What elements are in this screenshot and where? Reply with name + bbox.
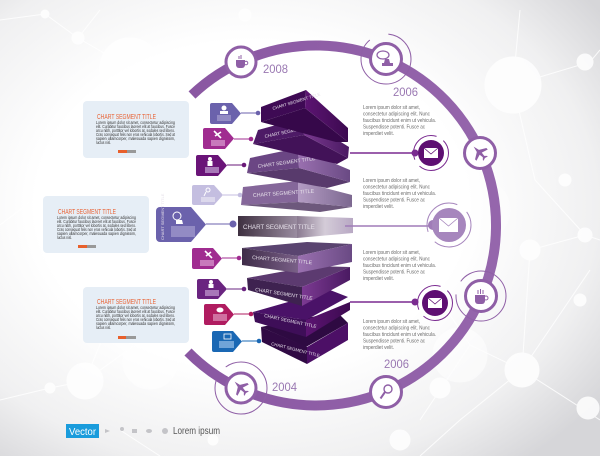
right description 1: faucibus tincidunt enim ut vehicula. <box>363 118 436 124</box>
right description 4: Lorem ipsum dolor sit amet, <box>363 319 420 325</box>
card: bottom chart segment: elit. Curabitur faucibus laoreet elit at faucibus. Fusce <box>96 309 176 314</box>
tag 6 <box>192 248 222 269</box>
tag 7 <box>197 279 227 299</box>
layer 1: CHART SEGMENT TITLE <box>272 92 321 111</box>
year 2006 top: 2006 <box>393 85 418 99</box>
card: middle chart segment: elit. Curabitur faucibus laoreet elit at faucibus. Fusce <box>57 219 137 224</box>
right description 3 <box>363 250 436 282</box>
callout: upper envelope <box>350 136 448 170</box>
right description 3: consectetur adipiscing elit. Nunc <box>363 256 430 262</box>
card: middle chart segment: CHART SEGMENT TITLE <box>58 207 116 216</box>
right description 2: faucibus tincidunt enim ut vehicula. <box>363 191 436 197</box>
card: top chart segment: luctus nisl. <box>96 140 111 145</box>
right description 4: Suspendisse potenti. Fusce ac <box>363 338 425 344</box>
layer 5: CHART SEGMENT TITLE <box>243 224 315 231</box>
card: bottom chart segment: luctus nisl. <box>96 325 111 330</box>
card: middle chart segment: luctus nisl. <box>57 235 72 240</box>
card: middle chart segment: sapien ullamcorper, malesuada sapien dignissim, <box>57 231 136 236</box>
card: middle chart segment <box>43 196 149 253</box>
layer 6 <box>242 242 352 273</box>
right description 1: imperdiet velit. <box>363 131 394 137</box>
badge: Vector: Vector <box>69 427 97 438</box>
footer label: Lorem ipsum <box>173 426 220 437</box>
card: top chart segment: sapien ullamcorper, malesuada sapien dignissim, <box>96 136 175 141</box>
card: top chart segment: CHART SEGMENT TITLE <box>97 112 156 121</box>
tag 8 <box>204 304 234 325</box>
icon: cup right <box>456 271 506 321</box>
tag 2 <box>203 128 234 149</box>
icon: plane bottom <box>215 362 267 414</box>
layer 2: CHART SEGMENT TITLE <box>264 123 317 139</box>
footer icons <box>105 427 168 434</box>
card: bottom chart segment: arcu nibh, porttitor vel lobortis at, sodales sed libero. <box>96 313 175 318</box>
right description 2 <box>363 178 436 210</box>
layer 4: CHART SEGMENT TITLE <box>253 189 315 199</box>
card: top chart segment: Lorem ipsum dolor sit amet, consectetur adipiscing <box>96 120 176 125</box>
right description 4 <box>363 319 436 351</box>
tag 4 <box>192 185 223 205</box>
icon: cup top <box>226 47 256 77</box>
right description 4: faucibus tincidunt enim ut vehicula. <box>363 332 436 338</box>
right description 3: faucibus tincidunt enim ut vehicula. <box>363 263 436 269</box>
tag 5: CHART SEGMENT TITLE <box>160 193 165 240</box>
right description 3: Suspendisse potenti. Fusce ac <box>363 270 425 276</box>
tag 5 <box>156 193 206 242</box>
card: bottom chart segment: CHART SEGMENT TITLE <box>97 297 156 306</box>
card: bottom chart segment: Lorem ipsum dolor sit amet, consectetur adipiscing <box>96 305 176 310</box>
tag 1 <box>210 103 241 124</box>
right description 1: Lorem ipsum dolor sit amet, <box>363 105 420 111</box>
right description 2: imperdiet velit. <box>363 204 394 210</box>
timeline ring <box>188 45 496 405</box>
card: top chart segment: arcu nibh, porttitor vel lobortis at, sodales sed libero. <box>96 128 175 133</box>
icon: plane right <box>464 138 496 168</box>
icon: magnifier <box>370 376 402 408</box>
layer 8 <box>253 290 350 337</box>
tag 9 <box>212 331 242 352</box>
tag connectors <box>206 111 261 343</box>
layer 3: CHART SEGMENT TITLE <box>257 156 316 170</box>
layer 9: CHART SEGMENT TITLE <box>271 341 320 358</box>
year 2006 bottom: 2006 <box>384 357 409 371</box>
layer 8: CHART SEGMENT TITLE <box>264 313 317 329</box>
card: top chart segment: Cras consequat felis non eros vehicula lobortis. Sed at <box>96 132 176 137</box>
layer 2 <box>253 118 349 164</box>
layer 1 <box>261 90 348 142</box>
card: top chart segment: elit. Curabitur faucibus laoreet elit at faucibus. Fusce <box>96 124 176 129</box>
right description 3: imperdiet velit. <box>363 276 394 282</box>
callout: lower envelope <box>350 286 452 320</box>
year 2008: 2008 <box>263 62 288 76</box>
year 2004: 2004 <box>272 380 297 394</box>
card: middle chart segment: arcu nibh, porttitor vel lobortis at, sodales sed libero. <box>57 223 136 228</box>
tag 3 <box>196 155 227 176</box>
layer 5 <box>238 216 353 238</box>
right description 2: Lorem ipsum dolor sit amet, <box>363 178 420 184</box>
right description 2: Suspendisse potenti. Fusce ac <box>363 198 425 204</box>
right description 2: consectetur adipiscing elit. Nunc <box>363 184 430 190</box>
card: middle chart segment: Cras consequat felis non eros vehicula lobortis. Sed at <box>57 227 137 232</box>
right description 1: consectetur adipiscing elit. Nunc <box>363 112 430 118</box>
layer 9 <box>261 312 348 364</box>
icon: cloud top right <box>361 34 411 84</box>
card: middle chart segment: Lorem ipsum dolor sit amet, consectetur adipiscing <box>57 215 137 220</box>
layer 4 <box>241 181 352 212</box>
card: top chart segment <box>83 101 189 158</box>
right description 1: Suspendisse potenti. Fusce ac <box>363 124 425 130</box>
right description 4: imperdiet velit. <box>363 345 394 351</box>
callout: middle envelope <box>345 203 471 247</box>
layer 7 <box>247 266 350 306</box>
right description 3: Lorem ipsum dolor sit amet, <box>363 250 420 256</box>
layer 7: CHART SEGMENT TITLE <box>255 287 314 302</box>
right description 4: consectetur adipiscing elit. Nunc <box>363 326 430 332</box>
card: bottom chart segment: sapien ullamcorper, malesuada sapien dignissim, <box>96 321 175 326</box>
card: bottom chart segment <box>83 287 189 343</box>
badge: Vector <box>66 424 99 438</box>
3D stacked chart <box>238 90 353 364</box>
layer 3 <box>247 148 350 188</box>
right description 1 <box>363 105 436 137</box>
layer 6: CHART SEGMENT TITLE <box>252 255 313 266</box>
card: bottom chart segment: Cras consequat felis non eros vehicula lobortis. Sed at <box>96 317 176 322</box>
